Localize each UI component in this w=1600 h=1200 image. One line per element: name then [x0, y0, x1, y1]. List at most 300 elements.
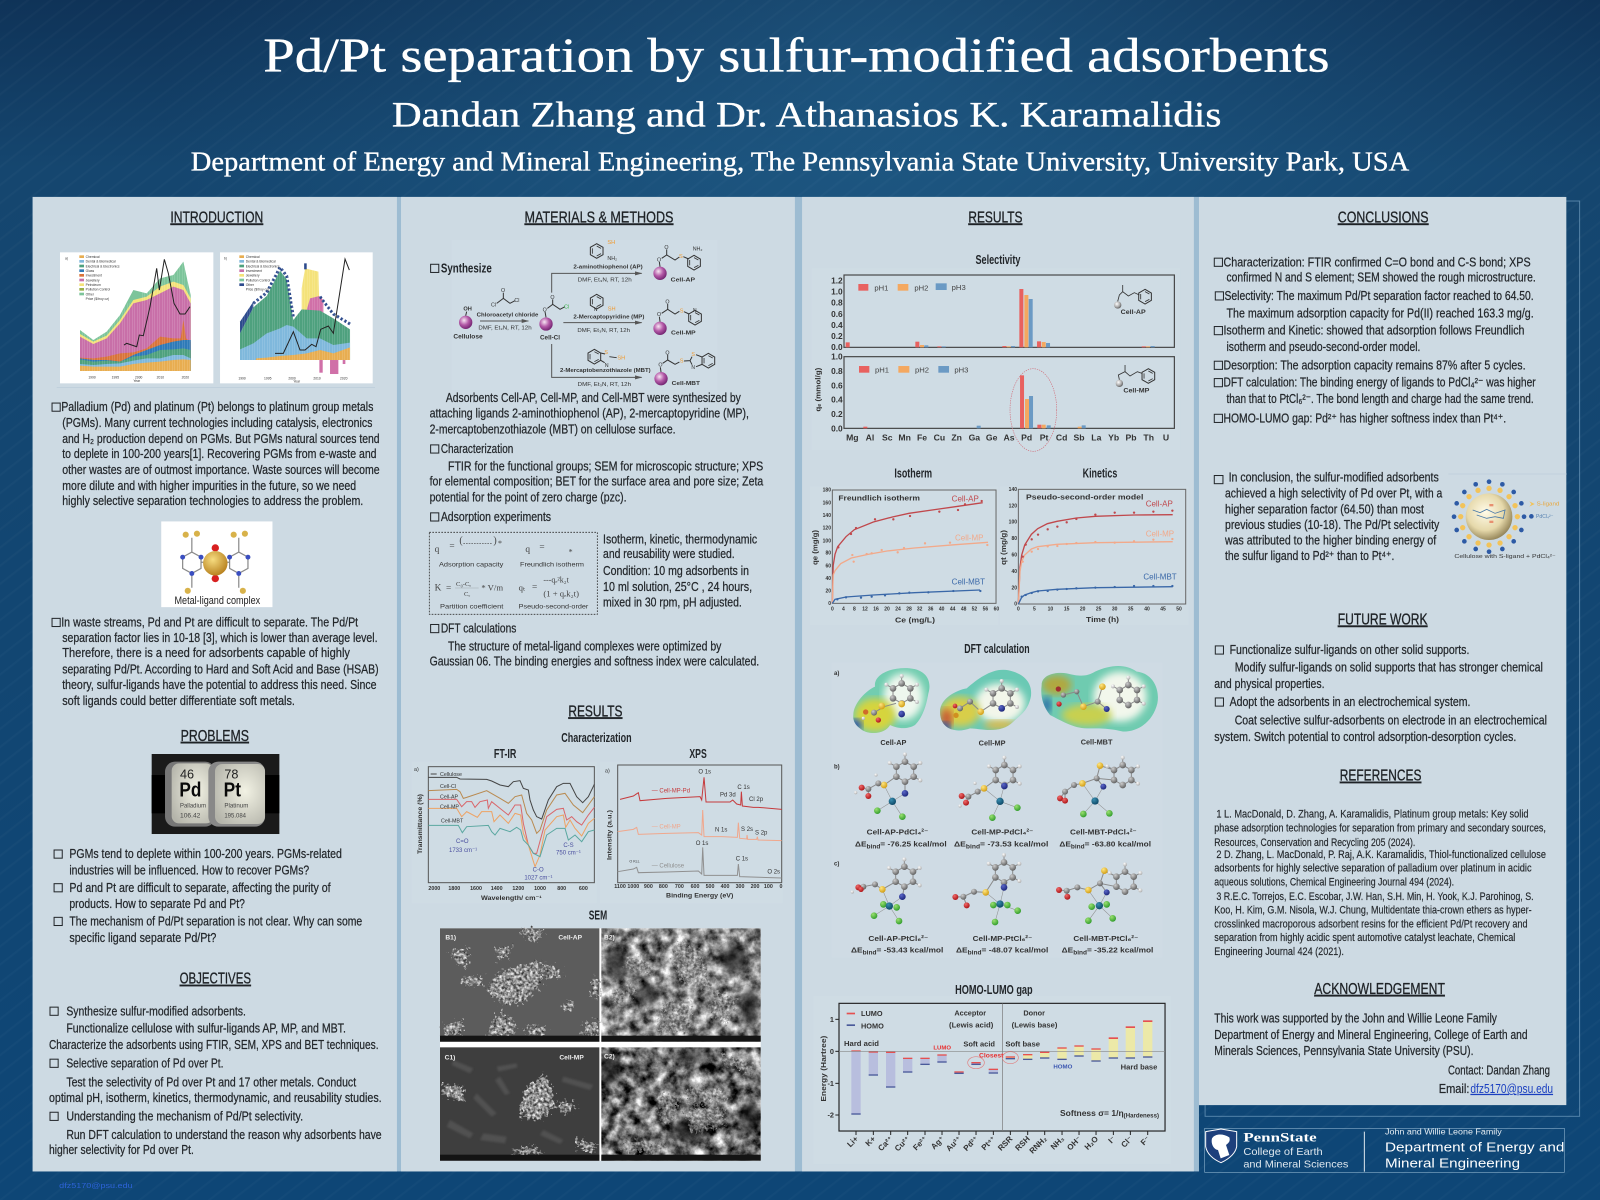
diagram: synthesis scheme: S	[691, 352, 695, 358]
chart: XPS survey spectra: O 2s	[767, 869, 780, 875]
chart: XPS survey spectra: N 1s	[715, 828, 727, 834]
images: SEM micrographs: C1)	[445, 1054, 455, 1061]
logo block: Penn State and department: PennState	[1243, 1131, 1317, 1145]
text: references list: Resources, Conservation and Recycling 205 (2024).	[1214, 837, 1415, 849]
text: conclusion statement: the sulfur ligand to Pd²⁺ than to Pt⁴⁺.	[1225, 549, 1394, 563]
chart: HOMO-LUMO energy levels: H₂O	[1083, 1134, 1100, 1152]
chart: XPS survey spectra	[600, 762, 783, 903]
heading: acknowledgement: ACKNOWLEDGEMENT	[1314, 981, 1445, 998]
text: references list: separation from highly acidic spent automotive catalyst leachate, Chemical	[1214, 932, 1515, 944]
figure: metal-ligand complex	[161, 521, 272, 607]
text: introduction paragraph 2: separation factor lies in 10-18 [3], which is lower than average level.	[62, 631, 378, 645]
chart: PGM demand by sector and palladium price: Other	[246, 283, 255, 287]
chart: FT-IR spectra: C=O	[456, 839, 469, 845]
chart: XPS survey spectra: O KLL	[629, 860, 640, 864]
logo block: Penn State and department	[1205, 1128, 1564, 1172]
figure: cellulose sphere with S-ligands and PdCl4: S-ligand	[1537, 502, 1560, 508]
labels: PtCl6 binding energies: ΔE	[851, 945, 862, 954]
chart: XPS survey spectra: — Cellulose	[652, 864, 685, 870]
chart: HOMO-LUMO energy levels: (Lewis acid)	[949, 1021, 994, 1030]
figure: Pd and Pt periodic table tiles: Pd	[179, 779, 201, 802]
molecule: Cell-MBT-PtCl6	[1056, 862, 1142, 924]
chart: FT-IR spectra: 600	[579, 886, 588, 892]
text: DFT calculations: DFT calculations	[441, 622, 516, 636]
chart: HOMO-LUMO energy levels: (Lewis base)	[1012, 1021, 1058, 1030]
chart: PGM demand by sector and palladium price	[57, 252, 375, 387]
chart: FT-IR spectra: Cell-MBT	[441, 818, 464, 824]
authors: Dandan Zhang and Dr. Athanasios K. Karamalidis	[392, 95, 1221, 135]
chart: PGM demand by sector and palladium price: 1990	[238, 376, 246, 380]
chart: XPS survey spectra: 100	[764, 884, 773, 890]
text: adsorption conditions: and reusability were studied.	[603, 547, 735, 561]
figure: Pd and Pt periodic table tiles: Palladium	[180, 802, 206, 809]
figure: cellulose sphere with S-ligands and PdCl4	[1448, 474, 1567, 560]
text: introduction paragraph 2: theory, sulfur-ligands have the potential to address this need. Since	[62, 678, 377, 692]
chart: HOMO-LUMO energy levels: Ag⁺	[929, 1134, 946, 1151]
chart: FT-IR spectra: Cell-AP	[440, 794, 459, 800]
chart: HOMO-LUMO energy levels: NH₃	[1049, 1134, 1066, 1152]
chart: XPS survey spectra: 700	[675, 884, 684, 890]
chart: PGM demand by sector and palladium price: Jewellery	[246, 274, 260, 278]
chart: XPS survey spectra: Pd 3d	[720, 793, 736, 799]
chart: pseudo-second-order kinetics: 40	[1144, 607, 1150, 613]
chart: PGM demand by sector and palladium price: Year	[293, 380, 301, 384]
chart: pseudo-second-order kinetics: 5	[1033, 607, 1036, 613]
chart: HOMO-LUMO energy levels: Energy (Hartree)	[819, 1035, 828, 1102]
images: SEM micrographs: B1)	[445, 934, 456, 941]
figure: Pd and Pt periodic table tiles: 78	[224, 767, 238, 781]
chart: PGM demand by sector and palladium price: Jewellery	[86, 278, 100, 282]
text: future work list: Coat selective sulfur-adsorbents on electrode in an electrochemical	[1235, 713, 1547, 727]
logo block: Penn State and department: John and Willie Leone Family	[1385, 1128, 1502, 1137]
text: introduction paragraph 1: and H₂ production depend on PGMs. But PGMs natural sources tend	[62, 432, 380, 446]
labels: PdCl4 binding energies: Cell-MBT-PdCl₄²⁻	[1070, 827, 1137, 836]
diagram: synthesis scheme: N	[693, 308, 697, 314]
labels: PtCl6 binding energies: bind	[968, 950, 982, 956]
figure: Pd and Pt periodic table tiles: Platinum	[224, 802, 249, 809]
chart: pseudo-second-order kinetics: Cell-AP	[1146, 500, 1173, 509]
chart: selectivity bar charts: 0.0	[831, 423, 843, 433]
chart: PGM demand by sector and palladium price: Electrical & Electronics	[86, 264, 120, 268]
diagram: synthesis scheme: SH	[608, 306, 616, 312]
title: Pd/Pt separation by sulfur-modified adsorbents	[263, 27, 1330, 82]
logo block: Penn State and department: Mineral Engineering	[1385, 1156, 1520, 1171]
diagram: synthesis scheme: O	[543, 307, 547, 313]
chart: selectivity bar charts: pH2	[915, 366, 929, 375]
chart: Freundlich isotherm: 0	[828, 601, 831, 607]
chart: XPS survey spectra: O 1s	[698, 769, 711, 775]
chart: pseudo-second-order kinetics: Pseudo-second-order model	[1026, 492, 1143, 501]
figure: DFT electrostatic potential and binding structures: Cell-MP	[979, 739, 1006, 748]
affiliation: Department of Energy and Mineral Engineering, The Pennsylvania State University, University Park, USA	[191, 145, 1409, 176]
chart: FT-IR spectra: Cellulose	[440, 772, 462, 778]
images: SEM micrographs: B2)	[604, 934, 615, 941]
diagram: synthesis scheme: Chloroacetyl chloride	[477, 312, 538, 318]
chart: HOMO-LUMO energy levels: HOMO	[861, 1021, 884, 1030]
text: introduction paragraph 1: more dilute and with higher impurities in the future, so we need	[62, 479, 356, 493]
chart: selectivity bar charts: 0.0	[831, 342, 843, 352]
panel: conclusions and references	[1199, 197, 1567, 1105]
chart: selectivity bar charts: 0.8	[831, 298, 843, 308]
text: future work list: Modify sulfur-ligands on solid supports that has stronger chemical	[1235, 660, 1543, 674]
text: characterization methods: FTIR for the functional groups; SEM for microscopic structure; XPS	[448, 459, 763, 473]
chart: pseudo-second-order kinetics: Cell-MBT	[1143, 572, 1177, 581]
labels: PdCl4 binding energies: Cell-AP-PdCl₄²⁻	[867, 827, 928, 836]
chart: pseudo-second-order kinetics: 0	[1014, 602, 1017, 608]
diagram: synthesis scheme: O	[664, 245, 669, 251]
text: future work list: system. Switch potential to control adsorption-desorption cycles.	[1214, 730, 1516, 744]
chart: Freundlich isotherm: 24	[895, 607, 901, 613]
text: synthesis description: Adsorbents Cell-AP, Cell-MP, and Cell-MBT were synthesized by	[446, 391, 741, 405]
text: synthesis description: attaching ligands 2-aminothiophenol (AP), 2-mercaptopyridine (MP),	[430, 406, 749, 420]
chart: selectivity bar charts: Cell-AP	[1121, 310, 1146, 316]
text: acknowledgement: This work was supported by the John and Willie Leone Family	[1214, 1011, 1497, 1025]
chart: selectivity bar charts: 0.6	[831, 309, 843, 319]
heading: introduction: INTRODUCTION	[170, 209, 263, 226]
subheading: isotherm: Isotherm	[894, 465, 932, 480]
ESP surface: Cell-MBT	[1041, 666, 1158, 732]
chart: pseudo-second-order kinetics: 15	[1064, 607, 1070, 613]
diagram: synthesis scheme: DMF, Et₃N, RT, 12h	[578, 277, 632, 283]
chart: selectivity bar charts: 0.8	[831, 366, 843, 376]
diagram: synthesis scheme: Cell-AP	[671, 278, 695, 284]
chart: Freundlich isotherm: 56	[983, 607, 988, 613]
molecule: Cell-MBT-PdCl4	[1057, 756, 1140, 817]
diagram: synthesis scheme: 2-aminothiophenol (AP)	[573, 265, 643, 271]
formula box: (1 + qₑk₂t)	[543, 589, 579, 599]
formula box: )	[493, 535, 497, 546]
text: references list: 3 R.E.C. Torrejos, E.C. Escobar, J.W. Han, S.H. Min, H. Yook, K.J. Parohinog, S.	[1216, 891, 1534, 903]
labels: PdCl4 binding energies	[855, 827, 1151, 851]
chart: PGM demand by sector and palladium price: 2000	[288, 376, 296, 380]
chart: selectivity bar charts: Cell-MP	[1123, 389, 1149, 395]
labels: PdCl4 binding energies: = -63.80 kcal/mol	[1085, 840, 1151, 849]
text: conclusion statement	[1214, 471, 1443, 563]
chart: PGM demand by sector and palladium price: Year	[133, 379, 141, 383]
text: introduction paragraph 1: Palladium (Pd) and platinum (Pt) belongs to platinum group metals	[61, 400, 373, 414]
chart: selectivity bar charts: 1.2	[831, 276, 843, 286]
text: problems list: products. How to separate Pd and Pt?	[69, 897, 245, 911]
text: conclusions list: confirmed N and S element; SEM showed the rough microstructure.	[1227, 271, 1536, 285]
text: objectives list: Characterize the adsorbents using FTIR, SEM, XPS and BET techniques.	[49, 1038, 379, 1052]
text: conclusion statement: previous studies (10-18). The Pd/Pt selectivity	[1225, 518, 1440, 532]
chart: selectivity bar charts: pH3	[954, 366, 968, 375]
figure: Pd and Pt periodic table tiles: 46	[180, 767, 194, 781]
text: objectives list: Selective separation of Pd over Pt.	[66, 1056, 223, 1070]
heading: results: RESULTS	[968, 209, 1022, 226]
text: acknowledgement: Minerals Sciences, Pennsylvania State University (PSU).	[1214, 1044, 1473, 1058]
formula box: q	[525, 545, 530, 555]
text: conclusions list: HOMO-LUMO gap: Pd²⁺ has higher softness index than Pt⁴⁺.	[1223, 411, 1506, 425]
diagram: synthesis scheme: Cl	[564, 305, 569, 311]
figure: metal-ligand complex: Metal-ligand complex	[174, 595, 261, 607]
text: references list: 2 D. Zhang, L. MacDonald, P. Raj, A.K. Karamalidis, Thiol-functionalized cellulose	[1216, 849, 1546, 861]
text: conclusions list	[1214, 255, 1536, 425]
text: conclusion statement: In conclusion, the sulfur-modified adsorbents	[1229, 471, 1439, 485]
subheading: FT-IR: FT-IR	[494, 746, 516, 761]
text: references list	[1214, 808, 1546, 958]
text: acknowledgement: Department of Energy and Mineral Engineering, College of Earth and	[1214, 1028, 1528, 1042]
chart: selectivity bar charts: pH1	[874, 284, 888, 293]
text: characterization methods: Characterization	[441, 442, 513, 456]
molecule: Cell-MP-PdCl4	[958, 756, 1022, 821]
text: adsorption experiments label: Adsorption experiments	[441, 510, 551, 524]
chart: PGM demand by sector and palladium price: Investment	[86, 274, 102, 278]
chart: pseudo-second-order kinetics: Cell-MP	[1146, 530, 1174, 539]
text: references list: Engineering Journal 424 (2021).	[1214, 946, 1344, 958]
text: introduction paragraph 1: (PGMs). Many current technologies including catalysis, electronics	[62, 416, 372, 430]
chart: XPS survey spectra: 0	[780, 884, 783, 890]
formula box: Cₑ	[464, 591, 470, 598]
chart: PGM demand by sector and palladium price: Chemical	[246, 255, 260, 259]
text: conclusion statement: achieved a high selectivity of Pd over Pt, with a	[1225, 486, 1443, 500]
chart: XPS survey spectra: S 2p	[755, 830, 768, 836]
labels: PtCl6 binding energies	[851, 934, 1153, 956]
diagram: synthesis scheme: Cell-MBT	[672, 381, 701, 387]
heading: conclusions: CONCLUSIONS	[1338, 209, 1429, 226]
chart: HOMO-LUMO energy levels: (Hardeness)	[1124, 1114, 1159, 1120]
chart: selectivity bar charts: 0.6	[831, 380, 843, 390]
text: problems list: specific ligand separate Pd/Pt?	[69, 931, 216, 945]
diagram: synthesis scheme: O	[665, 350, 670, 356]
text: objectives list: Understanding the mechanism of Pd/Pt selectivity.	[66, 1109, 303, 1123]
subheading: XPS: XPS	[689, 746, 707, 761]
chart: HOMO-LUMO energy levels: Closest	[979, 1052, 1004, 1059]
images: SEM micrographs	[440, 928, 761, 1161]
text: conclusions list: Isotherm and Kinetic: showed that adsorption follows Freundlich	[1223, 324, 1524, 338]
chart: selectivity bar charts: Ge	[986, 433, 998, 443]
chart: HOMO-LUMO energy levels: I⁻	[1107, 1134, 1117, 1145]
formula box: * V/m	[481, 583, 503, 593]
chart: HOMO-LUMO energy levels: Softness σ= 1/η	[1060, 1108, 1122, 1118]
text: conclusions list: Desorption: The adsorption capacity remains 87% after 5 cycles.	[1223, 358, 1526, 372]
text: problems list: The mechanism of Pd/Pt separation is not clear. Why can some	[69, 915, 362, 929]
chart: Freundlich isotherm: 100	[823, 538, 831, 544]
text: conclusions list: The maximum adsorption capacity for Pd(II) reached 163.3 mg/g.	[1227, 306, 1534, 320]
diagram: synthesis scheme: O	[665, 300, 670, 306]
chart: FT-IR spectra: Transmittance (%)	[417, 794, 424, 854]
diagram: synthesis scheme: Cell-Cl	[540, 336, 560, 342]
diagram: synthesis scheme: N	[594, 307, 598, 313]
text: problems list	[54, 847, 362, 945]
chart: FT-IR spectra: 1800	[448, 886, 460, 892]
chart: Freundlich isotherm: 52	[972, 607, 977, 613]
chart: HOMO-LUMO energy levels: Acceptor	[954, 1009, 986, 1018]
diagram: synthesis scheme: NH₂	[607, 256, 617, 262]
chart: selectivity bar charts: 0.2	[831, 331, 843, 341]
chart: selectivity bar charts	[812, 268, 1180, 451]
diagram: synthesis scheme: O	[658, 363, 663, 369]
images: SEM micrographs: Cell-AP	[558, 934, 583, 941]
formula box: qₜ	[519, 583, 526, 593]
labels: PdCl4 binding energies: ΔE	[1059, 840, 1070, 849]
formula box: ---qₑ²k₂t	[543, 576, 570, 585]
chart: pseudo-second-order kinetics: 45	[1160, 607, 1166, 613]
logo block: Penn State and department: and Mineral Sciences	[1243, 1159, 1348, 1170]
chart: HOMO-LUMO energy levels: Soft acid	[963, 1039, 995, 1048]
labels: PdCl4 binding energies: = -76.25 kcal/mol	[880, 840, 947, 849]
chart: HOMO-LUMO energy levels: Ca²⁺	[876, 1134, 895, 1153]
chart: FT-IR spectra: 750 cm⁻¹	[556, 851, 581, 857]
formula box: Partition coefficient	[440, 603, 504, 610]
chart: FT-IR spectra: 1027 cm⁻¹	[524, 875, 553, 881]
chart: PGM demand by sector and palladium price: b)	[224, 256, 227, 260]
labels: PdCl4 binding energies: bind	[966, 845, 980, 851]
chart: HOMO-LUMO energy levels: Fe²⁺	[911, 1134, 929, 1152]
subheading: HOMO-LUMO gap: HOMO-LUMO gap	[955, 982, 1033, 997]
heading: materials and methods: MATERIALS & METHODS	[524, 209, 673, 226]
formula box: Freundlich isotherm	[520, 562, 585, 569]
chart: HOMO-LUMO energy levels: Hard base	[1121, 1062, 1157, 1071]
text: characterization methods: for elemental composition; BET for the surface area and pore size; Zeta	[430, 475, 764, 489]
text: DFT calculations	[430, 622, 759, 668]
chart: XPS survey spectra: — Cell-MP-Pd	[652, 788, 690, 794]
text: characterization methods	[430, 442, 764, 505]
chart: XPS survey spectra: Cl 2p	[749, 797, 764, 803]
diagram: synthesis scheme: Cl	[514, 298, 519, 304]
diagram: synthesis scheme: O	[501, 288, 505, 294]
diagram: synthesis scheme: SH	[617, 356, 625, 362]
formula box: C₀-Cₑ	[456, 581, 471, 588]
chart: PGM demand by sector and palladium price: Pollution Control	[246, 278, 270, 282]
chart: pseudo-second-order kinetics: Time (h)	[1086, 615, 1120, 624]
figure: Pd and Pt periodic table tiles	[152, 754, 279, 834]
chart: Freundlich isotherm: 4	[842, 607, 845, 613]
chart: pseudo-second-order kinetics: 40	[1011, 569, 1017, 575]
chart: HOMO-LUMO energy levels: 1	[830, 1015, 834, 1024]
images: SEM micrographs: C2)	[604, 1053, 615, 1060]
text: conclusions list: Characterization: FTIR confirmed C=O bond and C-S bond; XPS	[1223, 255, 1531, 269]
ESP surface: Cell-AP	[853, 668, 930, 733]
formula box: =	[532, 582, 537, 592]
chart: pseudo-second-order kinetics: 80	[1011, 536, 1017, 542]
chart: HOMO-LUMO energy levels: LUMO	[933, 1046, 952, 1052]
text: problems list: Pd and Pt are difficult to separate, affecting the purity of	[69, 881, 331, 895]
chart: PGM demand by sector and palladium price: Price ($/troy oz)	[86, 297, 109, 301]
panel: materials and methods, results	[401, 197, 795, 1171]
chart: HOMO-LUMO energy levels	[813, 996, 1171, 1164]
chart: Freundlich isotherm: 80	[825, 551, 831, 557]
chart: XPS survey spectra: C 1s	[737, 785, 750, 791]
text: future work list: Functionalize sulfur-ligands on other solid supports.	[1230, 643, 1469, 657]
diagram: synthesis scheme: S	[604, 350, 608, 356]
diagram: synthesis scheme: NH₂	[693, 247, 702, 253]
chart: PGM demand by sector and palladium price: 2010	[157, 375, 164, 379]
formula box: =	[449, 542, 455, 552]
chart: selectivity bar charts: 0.4	[831, 320, 843, 330]
chart: PGM demand by sector and palladium price: a)	[65, 256, 68, 260]
text: objectives list: Test the selectivity of Pd over Pt and 17 other metals. Conduct	[66, 1076, 357, 1090]
chart: selectivity bar charts: pH3	[952, 283, 966, 292]
chart: PGM demand by sector and palladium price: Petroleum	[86, 283, 101, 287]
subheading: selectivity: Selectivity	[976, 252, 1021, 267]
chart: FT-IR spectra: 2000	[428, 886, 440, 892]
chart: PGM demand by sector and palladium price: 1990	[88, 375, 96, 379]
figure: cellulose sphere with S-ligands and PdCl4: PdCl₄²⁻	[1536, 514, 1554, 520]
heading: problems: PROBLEMS	[181, 728, 249, 745]
chart: FT-IR spectra: C-O	[533, 867, 544, 873]
diagram: synthesis scheme: DMF, Et₃N, RT, 12h	[577, 328, 630, 334]
chart: PGM demand by sector and palladium price: 2020	[340, 376, 348, 380]
diagram: synthesis scheme: Cellulose	[453, 335, 483, 341]
chart: Freundlich isotherm: 40	[939, 607, 945, 613]
chart: PGM demand by sector and palladium price: Dental & Biomedical	[246, 260, 276, 264]
labels: PdCl4 binding energies: Cell-MP-PdCl₄²⁻	[971, 827, 1033, 836]
figure: Pd and Pt periodic table tiles: Pt	[224, 779, 241, 802]
footer link: dfz5170@psu.edu	[59, 1182, 133, 1190]
chart: pseudo-second-order kinetics: 50	[1176, 607, 1182, 613]
figure: DFT electrostatic potential and binding structures: Cell-AP	[880, 738, 907, 747]
ESP surface: Cell-MP	[940, 670, 1032, 730]
subheading: characterization: Characterization	[561, 730, 632, 745]
text: contact details: Email:	[1439, 1082, 1469, 1096]
figure: DFT electrostatic potential and binding structures: a)	[834, 671, 839, 677]
chart: PGM demand by sector and palladium price: 1995	[112, 375, 119, 379]
chart: pseudo-second-order kinetics: 140	[1009, 487, 1017, 493]
figure: DFT electrostatic potential and binding structures: c)	[834, 862, 839, 868]
labels: PtCl6 binding energies: = -53.43 kcal/mol	[877, 945, 943, 954]
subheading: kinetics: Kinetics	[1083, 465, 1117, 480]
chart: pseudo-second-order kinetics: 30	[1112, 607, 1118, 613]
chart: selectivity bar charts: La	[1091, 433, 1102, 443]
chart: Freundlich isotherm: 48	[961, 607, 967, 613]
heading: references: REFERENCES	[1340, 768, 1421, 785]
chart: selectivity bar charts: Ga	[969, 433, 980, 443]
text: problems list: PGMs tend to deplete within 100-200 years. PGMs-related	[69, 847, 342, 861]
chart: selectivity bar charts: Zn	[951, 433, 962, 443]
formula box: *	[569, 548, 573, 557]
formula box: *	[498, 539, 502, 548]
logo block: Penn State and department: College of Earth	[1243, 1147, 1323, 1158]
chart: Freundlich isotherm: 180	[823, 488, 831, 494]
chart: PGM demand by sector and palladium price: 2020	[182, 375, 189, 379]
formula box: (	[459, 535, 463, 546]
chart: pseudo-second-order kinetics: qt (mg/g)	[999, 529, 1008, 565]
chart: HOMO-LUMO energy levels: Au³⁺	[944, 1134, 963, 1153]
text: adsorption conditions: mixed in 30 rpm, pH adjusted.	[603, 596, 742, 610]
text: introduction paragraph 2: soft ligands could better differentiate soft metals.	[62, 694, 295, 708]
text: references list: crosslinked macroporous adsorbent resins for the efficient Pd/Pt recovery and	[1214, 919, 1528, 931]
chart: HOMO-LUMO energy levels: Soft base	[1005, 1039, 1040, 1048]
chart: Freundlich isotherm: 16	[873, 607, 879, 613]
chart: selectivity bar charts: 1.0	[831, 287, 843, 297]
chart: HOMO-LUMO energy levels: OH⁻	[1065, 1134, 1083, 1152]
chart: Freundlich isotherm: 32	[917, 607, 923, 613]
text: objectives list: Synthesize sulfur-modified adsorbents.	[66, 1004, 246, 1018]
figure: DFT electrostatic potential and binding structures: b)	[834, 764, 840, 770]
molecule: Cell-MP-PtCl6	[952, 853, 1021, 925]
chart: Freundlich isotherm: 28	[906, 607, 912, 613]
text: introduction paragraph 1	[52, 400, 380, 508]
chart: FT-IR spectra: 1400	[491, 886, 503, 892]
images: SEM micrographs: Cell-MP	[559, 1054, 584, 1061]
labels: PdCl4 binding energies: bind	[1071, 845, 1085, 851]
text: future work list	[1214, 643, 1547, 744]
chart: HOMO-LUMO energy levels: Cu²⁺	[893, 1134, 912, 1153]
chart: pseudo-second-order kinetics: 60	[1011, 552, 1017, 558]
chart: XPS survey spectra: 400	[721, 884, 730, 890]
chart: XPS survey spectra: — Cell-MP	[652, 824, 681, 830]
chart: Freundlich isotherm: 160	[823, 500, 831, 506]
chart: HOMO-LUMO energy levels: HOMO	[1053, 1064, 1073, 1070]
chart: Freundlich isotherm: 20	[884, 607, 890, 613]
text: objectives list: higher selectivity for Pd over Pt.	[49, 1143, 194, 1157]
chart: XPS survey spectra: Intensity (a.u.)	[606, 810, 613, 860]
chart: HOMO-LUMO energy levels: -1	[827, 1079, 834, 1088]
chart: PGM demand by sector and palladium price: Pollution Control	[86, 288, 110, 292]
text: conclusion statement: was attributed to the higher binding energy of	[1224, 533, 1437, 547]
chart: FT-IR spectra: 1000	[534, 886, 546, 892]
